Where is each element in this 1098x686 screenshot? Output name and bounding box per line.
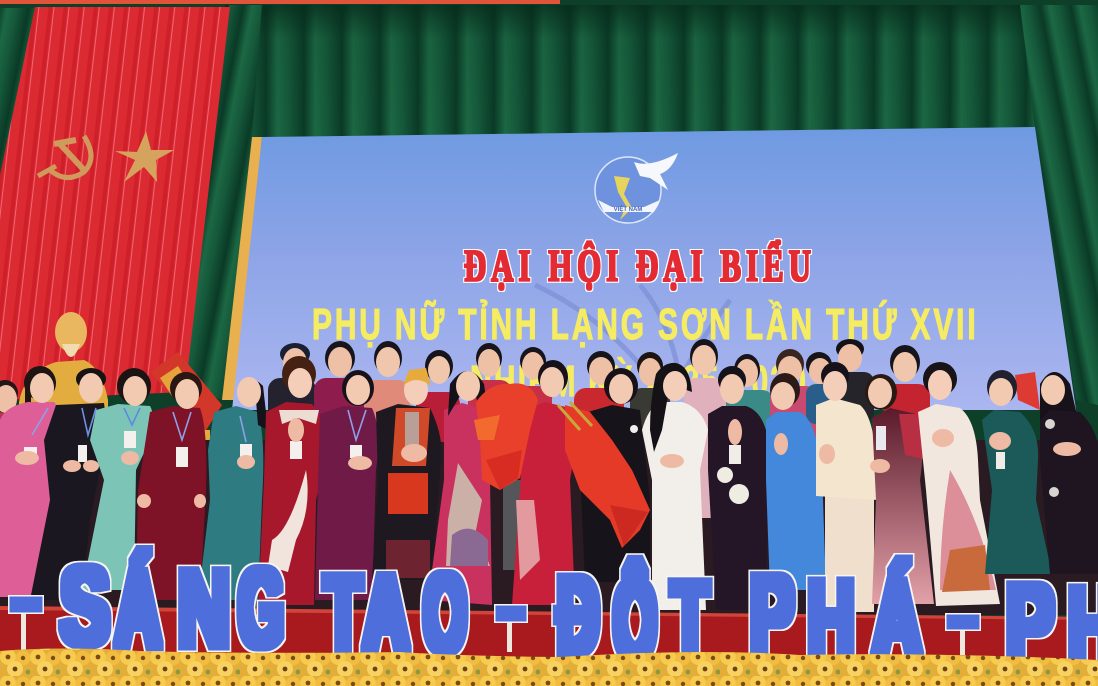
red curtain with party emblems: [0, 7, 230, 400]
icon: hammer and sickle: [38, 136, 91, 178]
bust of Ho Chi Minh: [19, 312, 108, 420]
delegate maroon gradient: [865, 374, 934, 604]
slogan letters: S: [60, 545, 110, 667]
delegate dark plum: [708, 366, 768, 610]
delegate in police uniform: [816, 362, 878, 612]
slogan letters: T: [671, 557, 709, 680]
delegate plum: [315, 370, 378, 600]
delegate white ao dai: [642, 363, 708, 610]
delegate dark red: [136, 372, 206, 600]
screen: [222, 127, 1076, 410]
icon: women's union emblem: [595, 153, 678, 223]
delegate grey sash: [503, 480, 523, 570]
icon: gold star: [115, 131, 174, 182]
slogan letters: O: [424, 552, 466, 675]
delegate far left: [0, 380, 18, 500]
delegate pink: [0, 366, 62, 597]
slogan letters: N: [178, 547, 230, 670]
slogan letters: [14, 545, 1098, 686]
dark backing behind delegates: [0, 440, 1098, 615]
slogan letters: G: [238, 546, 284, 670]
delegate in ethnic costume: [372, 368, 442, 580]
slogan letters: P: [1006, 561, 1054, 684]
slogan letters: T: [324, 551, 362, 674]
delegate red with phoenix: [258, 356, 326, 605]
icon: women's union emblem: VIỆT NAM: [614, 205, 642, 213]
sign posts: [21, 612, 965, 655]
sunflower border: [0, 648, 1098, 686]
delegate teal: [198, 377, 268, 600]
bouquet right: [558, 402, 650, 548]
flag decoration right: [1015, 372, 1040, 410]
slogan letters: P: [750, 554, 794, 676]
slogan letters: Á: [115, 548, 161, 671]
delegate black: [30, 368, 106, 600]
delegate mint: [82, 368, 153, 590]
back row of delegates: [268, 339, 930, 518]
slogan letters: Á: [872, 558, 922, 681]
slogan letters: Ộ: [614, 559, 656, 682]
slogan letters: Đ: [557, 553, 599, 677]
front row of delegates: [0, 356, 1098, 612]
delegate white floral: [918, 362, 1000, 606]
delegate pink-red floral: [428, 371, 495, 605]
flag decoration left: [150, 352, 222, 565]
bouquet left: [474, 383, 538, 490]
stage front: [0, 606, 1098, 686]
screen title line 2: PHỤ NỮ TỈNH LẠNG SƠN LẦN THỨ XVII: [312, 299, 976, 348]
top red trim: [0, 0, 560, 4]
delegate dark teal: [982, 370, 1052, 574]
delegate blue: [766, 373, 826, 590]
screen title line 3: NHIỆM KỲ 2025-2030: [470, 356, 806, 405]
slogan letters: Ạ: [363, 553, 409, 675]
delegate black floral: [1040, 372, 1098, 574]
delegate black with flowers: [580, 368, 650, 582]
screen title line 1: ĐẠI HỘI ĐẠI BIỂU: [464, 241, 811, 292]
faint branch artwork: [535, 285, 730, 390]
slogan letters: H: [808, 558, 854, 681]
delegate red centre: [512, 360, 575, 605]
